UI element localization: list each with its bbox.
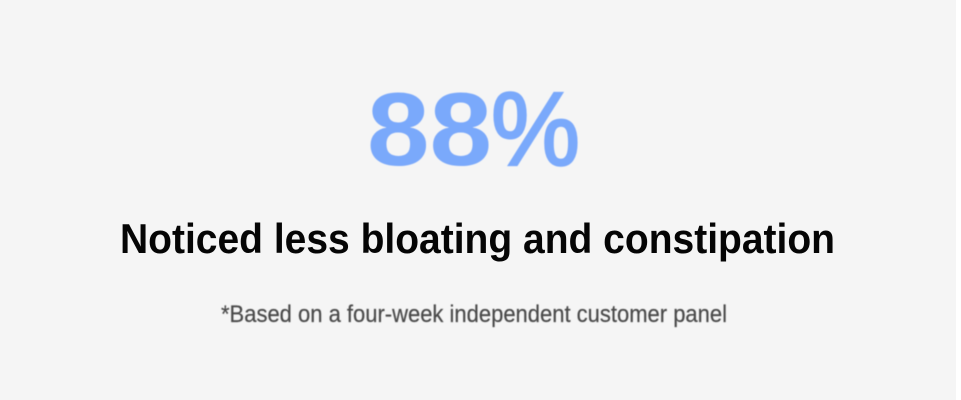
- heading: Noticed less bloating and constipation: [120, 215, 835, 262]
- big statistic: 88%: %: [491, 72, 580, 188]
- big statistic: 88%: 88: [367, 72, 492, 188]
- big statistic: 88%: [367, 72, 580, 188]
- footnote: *Based on a four-week independent customer panel: [221, 301, 727, 328]
